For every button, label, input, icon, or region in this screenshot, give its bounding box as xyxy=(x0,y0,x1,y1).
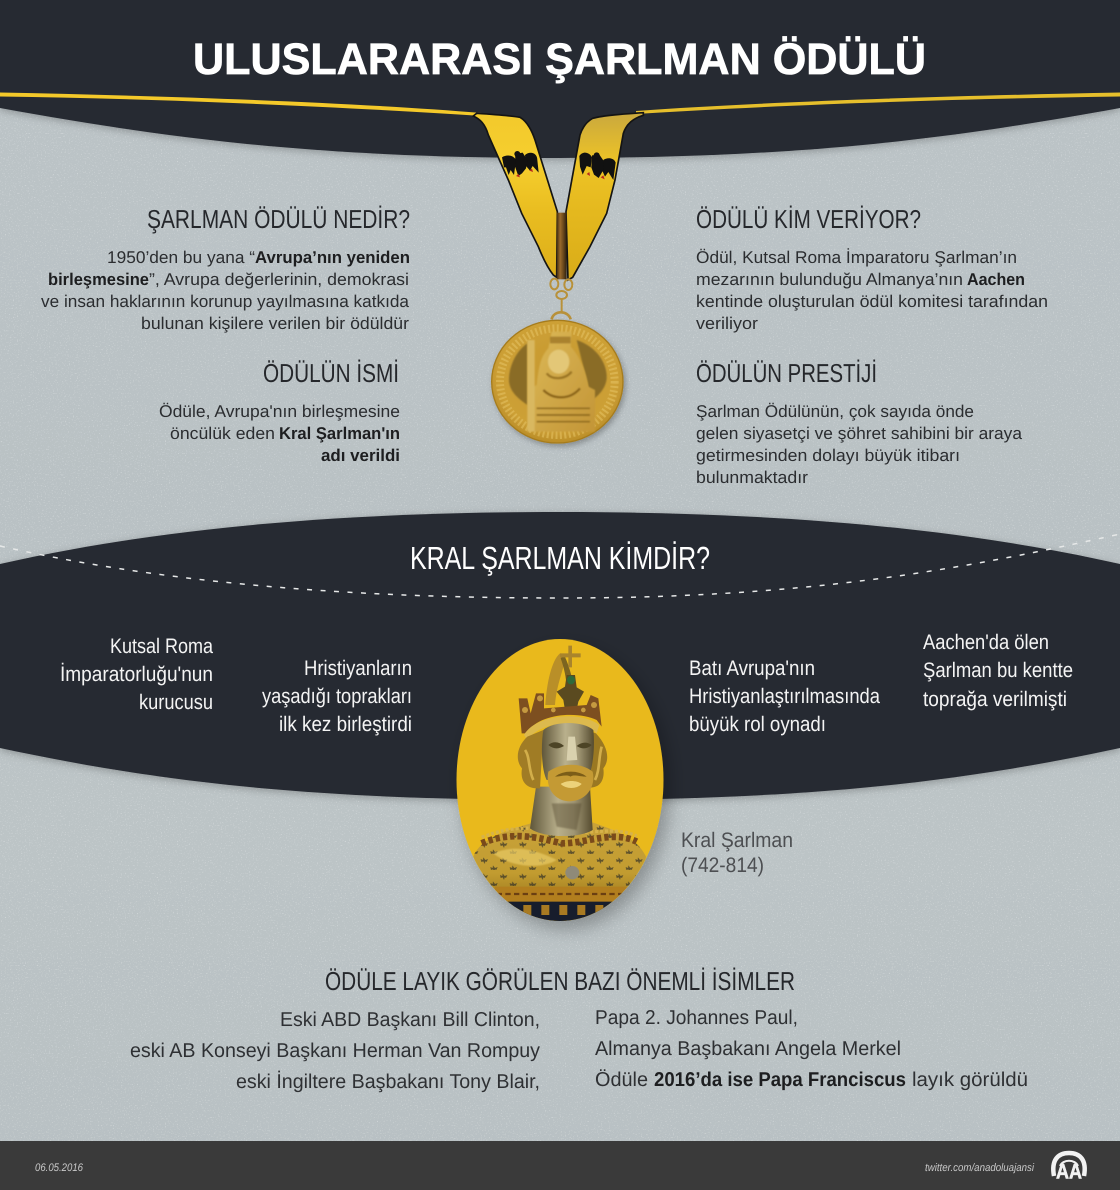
ribbon thin right edge xyxy=(636,92,1120,114)
crown arch xyxy=(545,653,566,705)
shoulders xyxy=(473,823,646,923)
fact: founder of the Holy Roman Empire: Kutsal Roma xyxy=(110,635,213,658)
text block: prize description: birleşmesine xyxy=(48,270,149,289)
text block: prestige: Şarlman Ödülünün, çok sayıda önde xyxy=(696,402,974,421)
text block: name explanation xyxy=(159,402,400,465)
crown plate ornament xyxy=(557,675,584,710)
fact: founder of the Holy Roman Empire: İmparatorluğu'nun xyxy=(60,662,213,686)
panel: notable laureates xyxy=(130,966,1028,1093)
right ribbon xyxy=(566,113,643,280)
top dark banner xyxy=(0,0,1120,158)
caption: Kral Şarlman dates: Kral Şarlman xyxy=(681,829,793,852)
crown cross xyxy=(560,646,581,667)
blue base with lilies xyxy=(508,902,612,921)
title: ULUSLARARASI ŞARLMAN ÖDÜLÜ xyxy=(193,35,926,84)
ribbon thin left edge xyxy=(0,92,482,116)
eagle emblem right xyxy=(579,152,616,180)
beard xyxy=(548,765,593,801)
fact: Christianization of Western Europe: büyük rol oynadı xyxy=(689,713,826,736)
text block: prize description: ”, Avrupa değerlerinin, demokrasi xyxy=(149,270,409,289)
heading: Ödülün Prestiji: ÖDÜLÜN PRESTİJİ xyxy=(696,358,877,388)
medal dark field xyxy=(509,340,607,405)
text block: prestige: gelen siyasetçi ve şöhret sahibini bir araya xyxy=(696,424,1023,443)
twitter handle: twitter.com/anadoluajansi xyxy=(925,1162,1034,1174)
panel: what is the prize (left) xyxy=(41,204,410,333)
middle dark band xyxy=(0,512,1120,800)
fact: buried in Aachen: Şarlman bu kentte xyxy=(923,659,1073,682)
text block: prize description xyxy=(41,248,410,333)
text block: committee: kentinde oluşturulan ödül komitesi tarafından xyxy=(696,292,1048,311)
laureates list right: Almanya Başbakanı Angela Merkel xyxy=(595,1038,901,1060)
text block: prestige xyxy=(696,402,1023,487)
medal rings xyxy=(550,279,572,319)
heading: Ödülün İsmi: ÖDÜLÜN İSMİ xyxy=(263,358,399,388)
dashed stitched line xyxy=(0,534,1120,598)
face xyxy=(542,723,594,780)
laureates list right: Ödüle xyxy=(595,1069,648,1091)
text block: committee: mezarının bulunduğu Almanya’nın xyxy=(696,270,963,289)
footer bar xyxy=(0,1141,1120,1190)
text block: name explanation: Kral Şarlman'ın xyxy=(279,424,400,443)
text block: committee: veriliyor xyxy=(696,314,758,333)
fact: united Christian lands xyxy=(262,657,412,736)
icon: Anadolu Agency logo: AA xyxy=(1056,1160,1082,1184)
hair xyxy=(518,730,543,788)
left ribbon xyxy=(473,113,557,277)
laureates list right xyxy=(595,1007,1028,1091)
text block: name explanation: adı verildi xyxy=(321,446,400,465)
heading: Kral Şarlman Kimdir: KRAL ŞARLMAN KİMDİR? xyxy=(410,540,710,576)
panel: name of the prize (left) xyxy=(159,358,400,465)
panel: prestige of the prize (right) xyxy=(696,358,1023,487)
medal disc xyxy=(492,320,623,443)
text block: prestige: bulunmaktadır xyxy=(696,468,808,487)
fact: united Christian lands: Hristiyanların xyxy=(304,657,412,680)
heading: Şarlman Ödülü Nedir: ŞARLMAN ÖDÜLÜ NEDİR? xyxy=(147,204,410,234)
fact: Christianization of Western Europe xyxy=(689,657,880,736)
caption: Kral Şarlman dates: (742-814) xyxy=(681,854,764,877)
text block: committee: Aachen xyxy=(967,270,1025,289)
fact: Christianization of Western Europe: Batı Avrupa'nın xyxy=(689,657,815,680)
gemstone xyxy=(565,866,579,879)
fact: founder of the Holy Roman Empire: kurucusu xyxy=(139,691,213,714)
laureates list left: eski İngiltere Başbakanı Tony Blair, xyxy=(236,1070,540,1093)
icon: Anadolu Agency logo xyxy=(1053,1153,1085,1184)
panel: who gives the prize (right) xyxy=(696,204,1048,333)
laureates list left: eski AB Konseyi Başkanı Herman Van Rompuy xyxy=(130,1040,540,1062)
fact: founder of the Holy Roman Empire xyxy=(60,635,213,714)
fact: buried in Aachen: Aachen'da ölen xyxy=(923,631,1049,654)
fact: Christianization of Western Europe: Hristiyanlaştırılmasında xyxy=(689,685,880,708)
laureates list left: Eski ABD Başkanı Bill Clinton, xyxy=(280,1009,540,1031)
heading: Ödülü Kim Veriyor: ÖDÜLÜ KİM VERİYOR? xyxy=(696,204,921,234)
eagle emblem left xyxy=(502,151,539,177)
text block: name explanation: Ödüle, Avrupa'nın birleşmesine xyxy=(159,402,400,421)
caption: Kral Şarlman dates xyxy=(681,829,793,877)
crown band and points xyxy=(519,693,602,733)
medal seated figure xyxy=(527,332,595,432)
text block: name explanation: öncülük eden xyxy=(170,424,275,443)
fact: buried in Aachen: toprağa verilmişti xyxy=(923,688,1067,711)
neck xyxy=(530,787,593,836)
fact: united Christian lands: yaşadığı toprakları xyxy=(262,685,412,708)
collar jewels xyxy=(482,836,637,843)
fact: united Christian lands: ilk kez birleştirdi xyxy=(279,713,412,736)
text block: prize description: 1950’den bu yana “ xyxy=(107,248,255,267)
laureates list right: Papa 2. Johannes Paul, xyxy=(595,1007,798,1029)
eyes and nose xyxy=(548,742,592,748)
laureates list left xyxy=(130,1009,540,1093)
date: 06.05.2016 xyxy=(35,1162,84,1174)
laureates list right: layık görüldü xyxy=(912,1069,1028,1091)
ribbon centre strip xyxy=(557,213,567,279)
portrait: Charlemagne bust in yellow oval xyxy=(456,639,664,925)
fact: buried in Aachen xyxy=(923,631,1073,711)
text block: prize description: bulunan kişilere verilen bir ödüldür xyxy=(141,314,409,333)
text block: committee xyxy=(696,248,1048,333)
icon: ribbon and medal xyxy=(0,92,1120,443)
text block: committee: Ödül, Kutsal Roma İmparatoru Şarlman’ın xyxy=(696,248,1017,267)
heading: notable names: ÖDÜLE LAYIK GÖRÜLEN BAZI ÖNEMLİ İSİMLER xyxy=(325,966,795,996)
text block: prize description: Avrupa’nın yeniden xyxy=(255,248,410,267)
text block: prestige: getirmesinden dolayı büyük itibarı xyxy=(696,446,960,465)
laureates list right: 2016’da ise Papa Franciscus xyxy=(654,1069,906,1091)
jewelled belt xyxy=(495,887,627,902)
text block: prize description: ve insan haklarının korunup yayılmasına katkıda xyxy=(41,292,410,311)
